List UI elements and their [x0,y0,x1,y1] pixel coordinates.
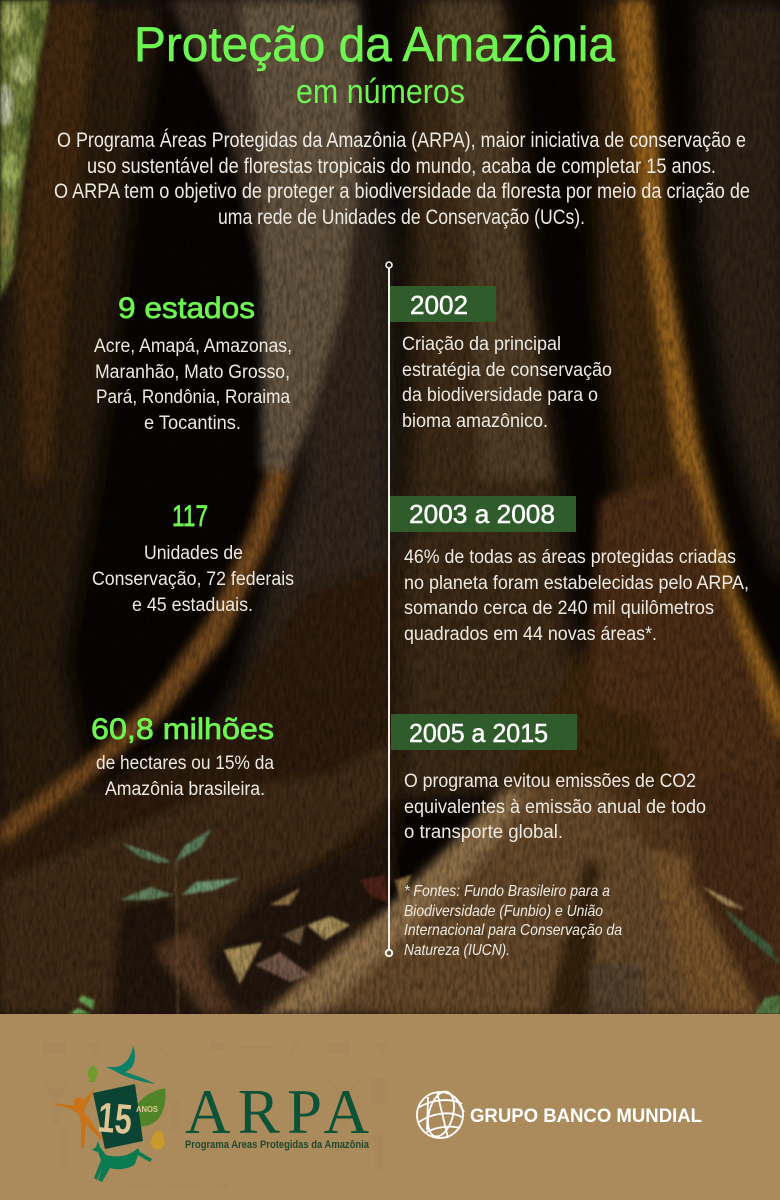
stat: 9 estados: e Tocantins. [144,413,241,434]
footer faint pattern [42,1042,389,1188]
logo: ARPA tagline: Programa Areas Protegidas da Amazônia [185,1139,370,1151]
stat: 9 estados: Pará, Rondônia, Roraima [96,387,290,408]
icon: anos label: ANOS [136,1104,158,1114]
timeline entry: 2002 [390,286,612,432]
logo: World Bank globe [417,1089,464,1139]
logo: World Bank wordmark: GRUPO BANCO MUNDIAL [470,1106,702,1127]
footnote [404,883,622,959]
timeline entry: 2003 a 2008 [390,496,749,645]
timeline entry: 2003 a 2008: 46% de todas as áreas protegidas criadas [404,547,736,568]
stat: 9 estados: Acre, Amapá, Amazonas, [94,336,292,357]
timeline entry: 2005 a 2015: o transporte global. [404,822,563,843]
background: foliage [0,0,50,300]
icon: turtle [151,1131,165,1149]
stat: 117 [92,500,294,616]
timeline entry: 2003 a 2008: somando cerca de 240 mil quilômetros [404,598,714,619]
icon: dark banner [93,1084,143,1149]
icon: person [55,1088,103,1148]
footnote: Biodiversidade (Funbio) e União [404,903,603,920]
icon: small leaf [88,1065,97,1082]
stat: 117: Unidades de [144,543,243,564]
title: Proteção da Amazônia [134,18,616,72]
stat: 60,8 milhões: de hectares ou 15% da [96,753,274,774]
logo: ARPA wordmark: ARPA [185,1077,370,1147]
stat: 60,8 milhões: 60,8 milhões [91,713,274,746]
intro text [54,129,750,229]
stat: 117: Conservação, 72 federais [92,569,294,590]
background: seedling [68,829,240,1014]
stat: 117: 117 [172,500,208,533]
timeline entry: 2005 a 2015: 2005 a 2015 [409,718,548,748]
footnote: * Fontes: Fundo Brasileiro para a [404,883,610,900]
footnote: Natureza (IUCN). [404,942,510,959]
icon: horse [92,1141,152,1182]
timeline entry: 2002: 2002 [410,290,468,320]
stat: 9 estados: Maranhão, Mato Grosso, [95,362,290,383]
timeline entry: 2003 a 2008: quadrados em 44 novas áreas*. [404,624,657,645]
icon: green leaf [129,1088,165,1131]
background: leaf pile [205,835,780,1014]
timeline entry: 2005 a 2015 [391,714,706,843]
stat: 117: e 45 estaduais. [132,595,253,616]
logo: ARPA 15 anos [55,1045,165,1182]
footnote: Internacional para Conservação da [404,922,622,939]
subtitle: em números [296,73,465,111]
timeline entry: 2005 a 2015: equivalentes à emissão anual de todo [404,797,706,818]
timeline entry: 2005 a 2015: O programa evitou emissões de CO2 [404,771,696,792]
icon: 15 numeral: 15 [96,1093,134,1143]
stat: 60,8 milhões: Amazônia brasileira. [105,779,265,800]
timeline entry: 2002: estratégia de conservação [402,360,612,381]
timeline entry: 2002: bioma amazônico. [402,411,548,432]
stat: 9 estados [94,292,292,434]
timeline entry: 2003 a 2008: 2003 a 2008 [409,499,555,529]
stat: 60,8 milhões [91,713,274,800]
footer band [0,1014,780,1200]
stat: 9 estados: 9 estados [118,292,255,325]
timeline line [386,262,392,956]
icon: bird [106,1045,155,1084]
timeline entry: 2003 a 2008: no planeta foram estabelecidas pelo ARPA, [404,573,749,594]
timeline entry: 2002: Criação da principal [402,334,561,355]
timeline entry: 2002: da biodiversidade para o [402,385,598,406]
intro text: uma rede de Unidades de Conservação (UCs). [218,206,585,229]
